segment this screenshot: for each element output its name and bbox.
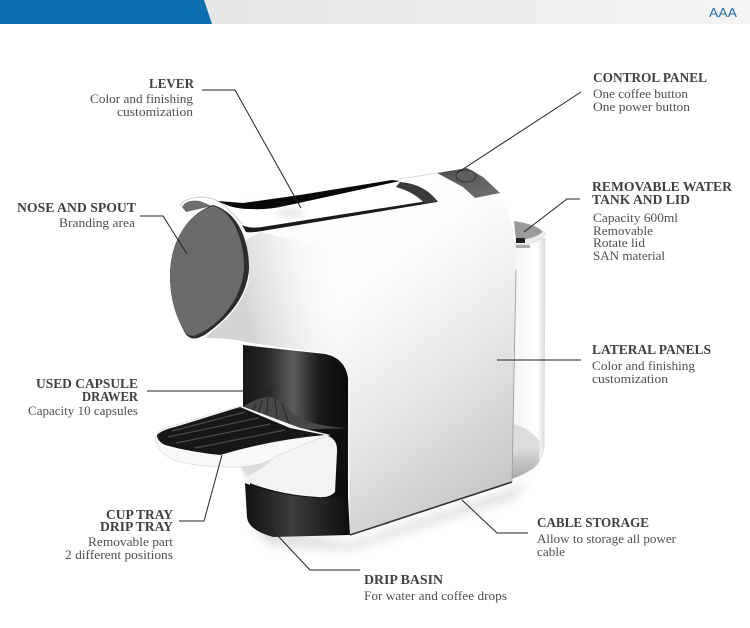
label: used capsule drawer — [28, 376, 138, 418]
leader line: lateral panels — [497, 359, 581, 361]
label: control panel — [593, 70, 707, 114]
water tank and lid — [512, 221, 546, 479]
label: removable water tank and lid: Removable — [593, 223, 653, 238]
header banner — [0, 0, 750, 24]
label: control panel: One power button — [593, 99, 691, 114]
label: cup tray and drip tray: Removable part — [88, 534, 173, 549]
label: cable storage: CABLE STORAGE — [537, 515, 649, 530]
label: lateral panels: Color and finishing — [592, 358, 696, 373]
label: nose and spout: Branding area — [59, 215, 135, 230]
blue header tab — [0, 0, 212, 24]
leader line: cable storage — [462, 500, 528, 533]
coffee machine illustration — [155, 168, 546, 550]
leader line: cup tray — [179, 455, 222, 521]
label: cup tray and drip tray — [65, 507, 173, 562]
label: lever: Color and finishing — [90, 91, 194, 106]
label: removable water tank and lid: Rotate lid — [593, 235, 645, 250]
label: removable water tank and lid: Capacity 600ml — [593, 210, 678, 225]
label: drip basin: For water and coffee drops — [364, 588, 507, 603]
label: drip basin: DRIP BASIN — [364, 572, 443, 587]
label: drip basin — [364, 572, 507, 603]
label: removable water tank and lid — [592, 179, 732, 263]
label: cup tray and drip tray: 2 different positions — [65, 547, 173, 562]
label: used capsule drawer: DRAWER — [82, 389, 138, 404]
label: control panel: CONTROL PANEL — [593, 70, 707, 85]
label: nose and spout — [17, 200, 136, 230]
leader line: nose and spout — [140, 216, 187, 254]
leader line: capsule drawer — [147, 390, 274, 392]
leader line: drip basin — [262, 519, 360, 570]
label: lever — [90, 76, 194, 119]
white block under tray — [241, 435, 337, 497]
label: used capsule drawer: Capacity 10 capsules — [28, 403, 138, 418]
label: removable water tank and lid: REMOVABLE WATER — [592, 179, 732, 194]
label: cup tray and drip tray: CUP TRAY — [106, 507, 173, 522]
floor shadow — [250, 478, 530, 550]
cup tray — [155, 406, 330, 467]
leader line: water tank — [524, 199, 580, 232]
white main body — [196, 168, 516, 535]
control panel — [437, 168, 500, 198]
label: cable storage — [537, 515, 677, 559]
label: removable water tank and lid: TANK AND LID — [592, 192, 690, 207]
label: cable storage: cable — [537, 544, 565, 559]
label: cup tray and drip tray: DRIP TRAY — [100, 519, 173, 534]
label: lever: customization — [117, 104, 194, 119]
capsule drawer — [243, 345, 348, 500]
label: lateral panels: LATERAL PANELS — [592, 342, 711, 357]
label: removable water tank and lid: SAN material — [593, 248, 665, 263]
label: lateral panels — [592, 342, 711, 386]
tray underside shade — [241, 459, 272, 476]
header label AAA: AAA — [709, 5, 737, 20]
label: lever: LEVER — [149, 76, 194, 91]
lever — [180, 172, 440, 232]
label: nose and spout: NOSE AND SPOUT — [17, 200, 136, 215]
label: control panel: One coffee button — [593, 86, 688, 101]
label: cable storage: Allow to storage all power — [537, 531, 677, 546]
nose and spout disc — [170, 205, 249, 339]
label: lateral panels: customization — [592, 371, 669, 386]
leader line: control panel — [457, 92, 581, 173]
button — [456, 170, 476, 182]
label: used capsule drawer: USED CAPSULE — [36, 376, 138, 391]
leader line: lever — [202, 90, 301, 208]
drip basin — [245, 483, 350, 537]
